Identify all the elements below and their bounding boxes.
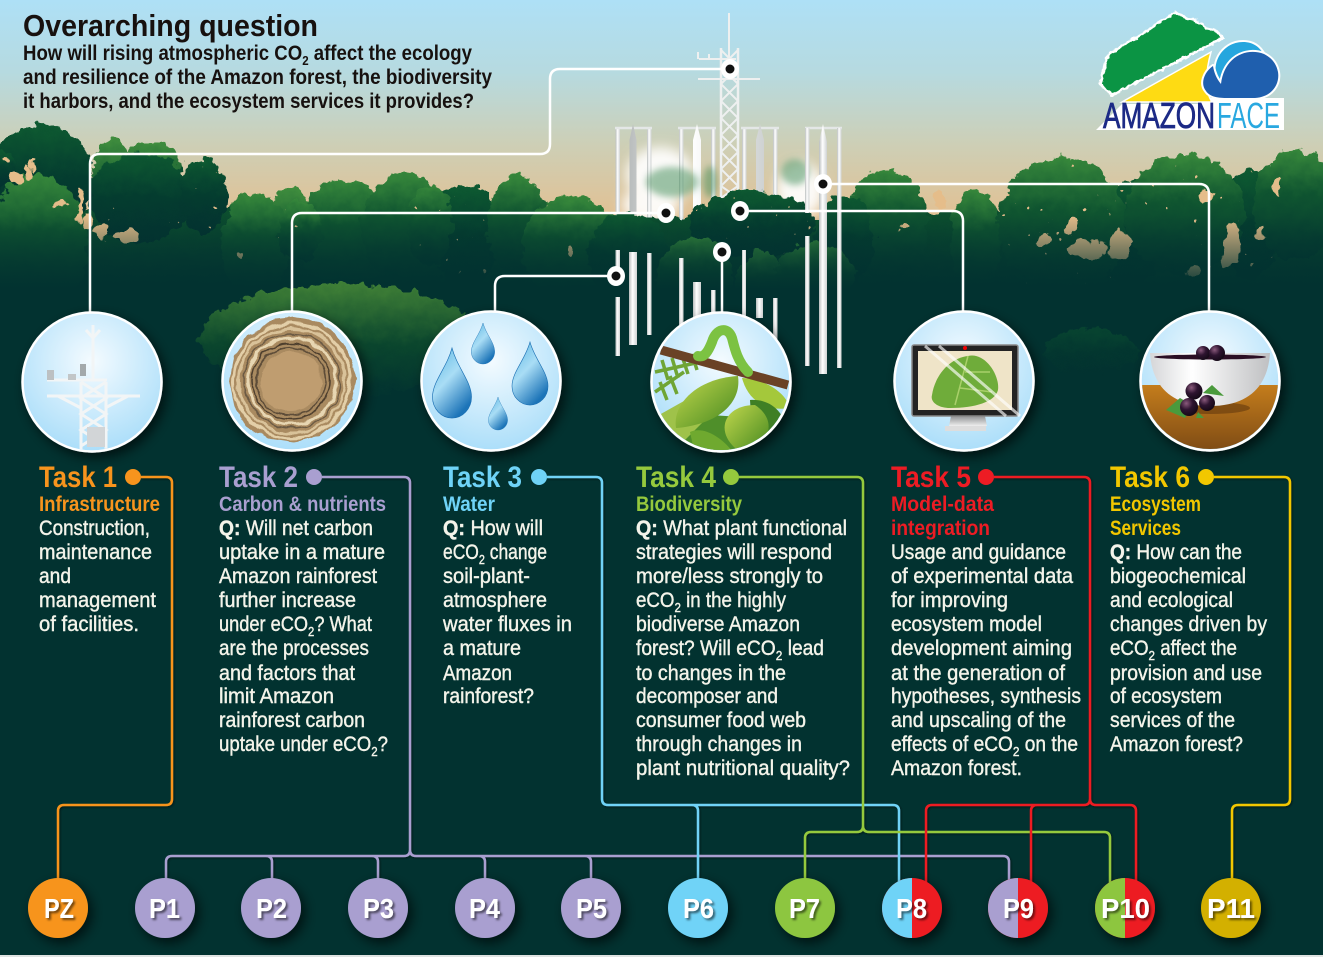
node P10: P10 bbox=[1101, 893, 1150, 924]
Task 5 body: 2 bbox=[1013, 744, 1019, 759]
Task 4 body: more/less strongly to bbox=[636, 565, 823, 588]
logo wordmark: FACE bbox=[1217, 95, 1280, 136]
node P3 bbox=[348, 878, 408, 938]
node P6: P6 bbox=[683, 893, 714, 924]
red connector Task 5 bbox=[926, 477, 1136, 884]
Task 1 body: of facilities. bbox=[39, 613, 139, 636]
ground background bbox=[0, 235, 1323, 957]
Task 3 body: a mature bbox=[443, 637, 521, 660]
Task 3 marker bbox=[531, 469, 547, 485]
coloured connector lines from tasks to projects bbox=[58, 477, 1290, 884]
Task 4 body: through changes in bbox=[636, 733, 802, 756]
Task 6 marker bbox=[1198, 469, 1214, 485]
panel: Task 2 bbox=[219, 461, 388, 759]
Task 6 body: Q: How can the bbox=[1110, 541, 1242, 564]
central trees around towers bbox=[588, 195, 875, 297]
Task 2 body: under eCO bbox=[219, 613, 322, 636]
Task 3 heading: Task 3 bbox=[443, 461, 522, 494]
node P11: P11 bbox=[1207, 893, 1255, 924]
node P1 bbox=[135, 878, 195, 938]
Task 3 body: Q: How will bbox=[443, 517, 543, 540]
Task 2 subtitle: Carbon & nutrients bbox=[219, 493, 386, 516]
ground below canopy bbox=[0, 289, 1323, 389]
Task 6 body: 2 bbox=[1149, 648, 1155, 663]
Task 2 body: limit Amazon bbox=[219, 685, 334, 708]
Task 5 subtitle: integration bbox=[891, 517, 990, 540]
instrument tower bbox=[698, 13, 760, 198]
panel: Task 5 bbox=[891, 461, 1081, 780]
tree crowns seen through CO2 cloud bbox=[646, 159, 809, 198]
logo wordmark: AMAZON bbox=[1103, 95, 1215, 136]
icon: instrument tower bbox=[22, 312, 162, 455]
green connector Task 4 bbox=[739, 477, 1110, 884]
Task 6 subtitle: Services bbox=[1110, 517, 1181, 540]
Task 6 subtitle: Ecosystem bbox=[1110, 493, 1201, 516]
node P8: P8 bbox=[896, 893, 927, 924]
Task 3 body: eCO bbox=[443, 541, 486, 564]
sky background bbox=[0, 0, 1323, 240]
Task 5 body: hypotheses, synthesis bbox=[891, 685, 1081, 708]
Task 2 body: rainforest carbon bbox=[219, 709, 365, 732]
understory fade to dark bbox=[0, 215, 1323, 290]
Task 4 body: consumer food web bbox=[636, 709, 806, 732]
icon: tree rings bbox=[222, 312, 362, 450]
FACE crossbars bbox=[615, 127, 842, 129]
Task 6 heading: Task 6 bbox=[1110, 461, 1190, 494]
overarching question text: affect the ecology bbox=[309, 42, 472, 65]
node P1: P1 bbox=[149, 893, 180, 924]
node P2 bbox=[241, 878, 301, 938]
Task 3 body: atmosphere bbox=[443, 589, 547, 612]
Task 6 body: and ecological bbox=[1110, 589, 1233, 612]
Task 1 heading: Task 1 bbox=[39, 461, 117, 494]
Task 1 marker bbox=[125, 469, 141, 485]
sky gaps through canopy bbox=[0, 157, 1282, 275]
overarching question text bbox=[23, 42, 492, 113]
panel: task circle illustrations bbox=[22, 312, 1280, 460]
Task 5 body: development aiming bbox=[891, 637, 1072, 660]
Task 5 body bbox=[891, 541, 1081, 780]
Task 2 body bbox=[219, 517, 388, 759]
Task 5 body: of experimental data bbox=[891, 565, 1073, 588]
Task 5 heading: Task 5 bbox=[891, 461, 971, 494]
Task 2 body: are the processes bbox=[219, 637, 369, 660]
node P3: P3 bbox=[363, 893, 394, 924]
Task 6 body: eCO bbox=[1110, 637, 1153, 660]
Task 2 body: and factors that bbox=[219, 662, 355, 685]
Task 2 body: Q: Will net carbon bbox=[219, 517, 373, 540]
continuous dark understory bbox=[0, 208, 1323, 300]
Task 3 body: soil-plant- bbox=[443, 565, 530, 588]
Task 4 body: 2 bbox=[674, 600, 681, 615]
FACE ring poles bbox=[616, 128, 778, 248]
Task 2 body: further increase bbox=[219, 589, 356, 612]
Task 2 body: uptake in a mature bbox=[219, 541, 385, 564]
overarching question text: it harbors, and the ecosystem services it provides? bbox=[23, 90, 474, 113]
Task 4 marker bbox=[723, 469, 739, 485]
back-row tree crowns bbox=[0, 124, 94, 232]
overarching question text: and resilience of the Amazon forest, the biodiversity bbox=[23, 66, 492, 89]
Task 4 body bbox=[636, 517, 850, 780]
right-hand FACE ring in front of forest bbox=[805, 124, 842, 374]
logo white backing bbox=[1096, 98, 1284, 130]
Task 5 body: for improving bbox=[891, 589, 1008, 612]
Task 5 body: effects of eCO bbox=[891, 733, 1025, 756]
dark speckled crowns bbox=[90, 153, 1280, 290]
Task 6 body: of ecosystem bbox=[1110, 685, 1222, 708]
Task 5 marker bbox=[978, 469, 994, 485]
Task 1 body: and bbox=[39, 565, 71, 588]
Task 4 heading: Task 4 bbox=[636, 461, 716, 494]
node P5: P5 bbox=[576, 893, 607, 924]
Task 2 body: 2 bbox=[371, 744, 378, 759]
green mid-row crowns bbox=[0, 150, 1323, 315]
Task 4 body: plant nutritional quality? bbox=[636, 757, 850, 780]
FACE central spikes bbox=[630, 124, 764, 250]
green speckled crowns right bbox=[278, 155, 1245, 293]
Task 3 body bbox=[442, 517, 572, 708]
Task 5 body: Usage and guidance bbox=[891, 541, 1066, 564]
Task 6 body: affect the bbox=[1155, 637, 1237, 660]
Task 4 body: forest? Will eCO bbox=[636, 637, 789, 660]
Task 6 body: Amazon forest? bbox=[1110, 733, 1243, 756]
Task 4 body: to changes in the bbox=[636, 662, 786, 685]
Task 6 body: biogeochemical bbox=[1110, 565, 1246, 588]
Task 5 body: ecosystem model bbox=[891, 613, 1042, 636]
Task 6 subtitle bbox=[1110, 493, 1201, 540]
blue connector Task 3 bbox=[547, 477, 899, 884]
Task 5 subtitle: Model-data bbox=[891, 493, 994, 516]
node P5 bbox=[561, 878, 621, 938]
Task 3 subtitle: Water bbox=[443, 493, 495, 516]
Task 3 body: Amazon bbox=[443, 662, 512, 685]
Task 1 body: maintenance bbox=[39, 541, 152, 564]
node P2: P2 bbox=[256, 893, 287, 924]
logo cloud bbox=[1203, 42, 1278, 98]
white connector lines from the question and towers to tasks bbox=[90, 69, 1209, 315]
logo canopy bbox=[1100, 12, 1223, 95]
panel: Task 6 bbox=[1110, 461, 1267, 756]
lower tower poles seen through the forest bbox=[616, 250, 778, 356]
panel: project nodes bbox=[28, 878, 1261, 938]
Task 5 body: Amazon forest. bbox=[891, 757, 1022, 780]
node P4 bbox=[455, 878, 515, 938]
node P7 bbox=[775, 878, 835, 938]
node P9 bbox=[988, 878, 1048, 938]
Task 5 body: at the generation of bbox=[891, 662, 1065, 685]
icon: water drops bbox=[422, 312, 560, 450]
Task 5 body: on the bbox=[1019, 733, 1078, 756]
node P7: P7 bbox=[789, 893, 820, 924]
node P8 bbox=[882, 878, 942, 938]
small green treetops bbox=[94, 139, 312, 243]
Task 4 body: 2 bbox=[776, 648, 782, 663]
FACE towers and CO2 clouds bbox=[615, 13, 842, 250]
Task 4 body: strategies will respond bbox=[636, 541, 832, 564]
Task 2 body: uptake under eCO bbox=[219, 733, 391, 756]
Task 2 body: Amazon rainforest bbox=[219, 565, 377, 588]
shrub behind task circles bbox=[200, 284, 480, 396]
Task 1 body: management bbox=[39, 589, 156, 612]
Task 4 body: eCO bbox=[636, 589, 679, 612]
Task 3 body: 2 bbox=[479, 552, 485, 567]
node P9: P9 bbox=[1003, 893, 1034, 924]
faint shrub right bbox=[1042, 330, 1138, 374]
Task 3 body: rainforest? bbox=[443, 685, 534, 708]
node PZ: PZ bbox=[44, 893, 74, 924]
node P11 bbox=[1201, 878, 1261, 938]
Task 6 body bbox=[1110, 541, 1267, 756]
Task 1 body bbox=[39, 517, 156, 636]
icon: monitor with leaf bbox=[894, 312, 1034, 450]
overarching question text: 2 bbox=[302, 53, 309, 68]
Task 4 body: lead bbox=[782, 637, 824, 660]
node P4: P4 bbox=[469, 893, 500, 924]
Task 2 body: ? bbox=[378, 733, 388, 756]
purple connector Task 2 bbox=[166, 477, 1009, 882]
overarching question text: How will rising atmospheric CO bbox=[23, 42, 338, 65]
Task 1 body: Construction, bbox=[39, 517, 150, 540]
icon: AmazonFACE logo bbox=[1096, 12, 1284, 136]
panel: Task 3 bbox=[442, 461, 572, 708]
Task 4 subtitle: Biodiversity bbox=[636, 493, 742, 516]
Task 2 marker bbox=[306, 469, 322, 485]
orange connector Task 1 bbox=[58, 477, 172, 882]
node P6 bbox=[668, 878, 728, 938]
Task 4 body: biodiverse Amazon bbox=[636, 613, 800, 636]
Task 5 body: and upscaling of the bbox=[891, 709, 1066, 732]
Task 4 body: Q: What plant functional bbox=[636, 517, 847, 540]
Task 6 body: changes driven by bbox=[1110, 613, 1267, 636]
node PZ bbox=[28, 878, 88, 938]
icon: caterpillar and leaves bbox=[650, 312, 790, 460]
Task 4 body: decomposer and bbox=[636, 685, 778, 708]
Task 3 body: change bbox=[485, 541, 547, 564]
Task 5 subtitle bbox=[891, 493, 994, 540]
Task 2 heading: Task 2 bbox=[219, 461, 298, 494]
Task 3 body: water fluxes in bbox=[442, 613, 572, 636]
CO2 clouds bbox=[622, 147, 824, 223]
title: Overarching question bbox=[23, 8, 318, 43]
Task 4 body: in the highly bbox=[681, 589, 786, 612]
Task 6 body: provision and use bbox=[1110, 662, 1262, 685]
icon: bowl of acai berries bbox=[1140, 312, 1280, 455]
panel: Task 1 bbox=[39, 461, 160, 636]
Task 2 body: ? What bbox=[314, 613, 372, 636]
logo yellow triangle bbox=[1122, 52, 1212, 102]
node P10 bbox=[1095, 878, 1155, 938]
forest canopy bbox=[0, 124, 1323, 320]
yellow connector Task 6 bbox=[1214, 477, 1290, 882]
tower location markers bbox=[607, 59, 832, 286]
Task 6 body: services of the bbox=[1110, 709, 1235, 732]
Task 1 subtitle: Infrastructure bbox=[39, 493, 160, 516]
Task 2 body: 2 bbox=[308, 624, 314, 639]
panel: Task 4 bbox=[636, 461, 850, 780]
